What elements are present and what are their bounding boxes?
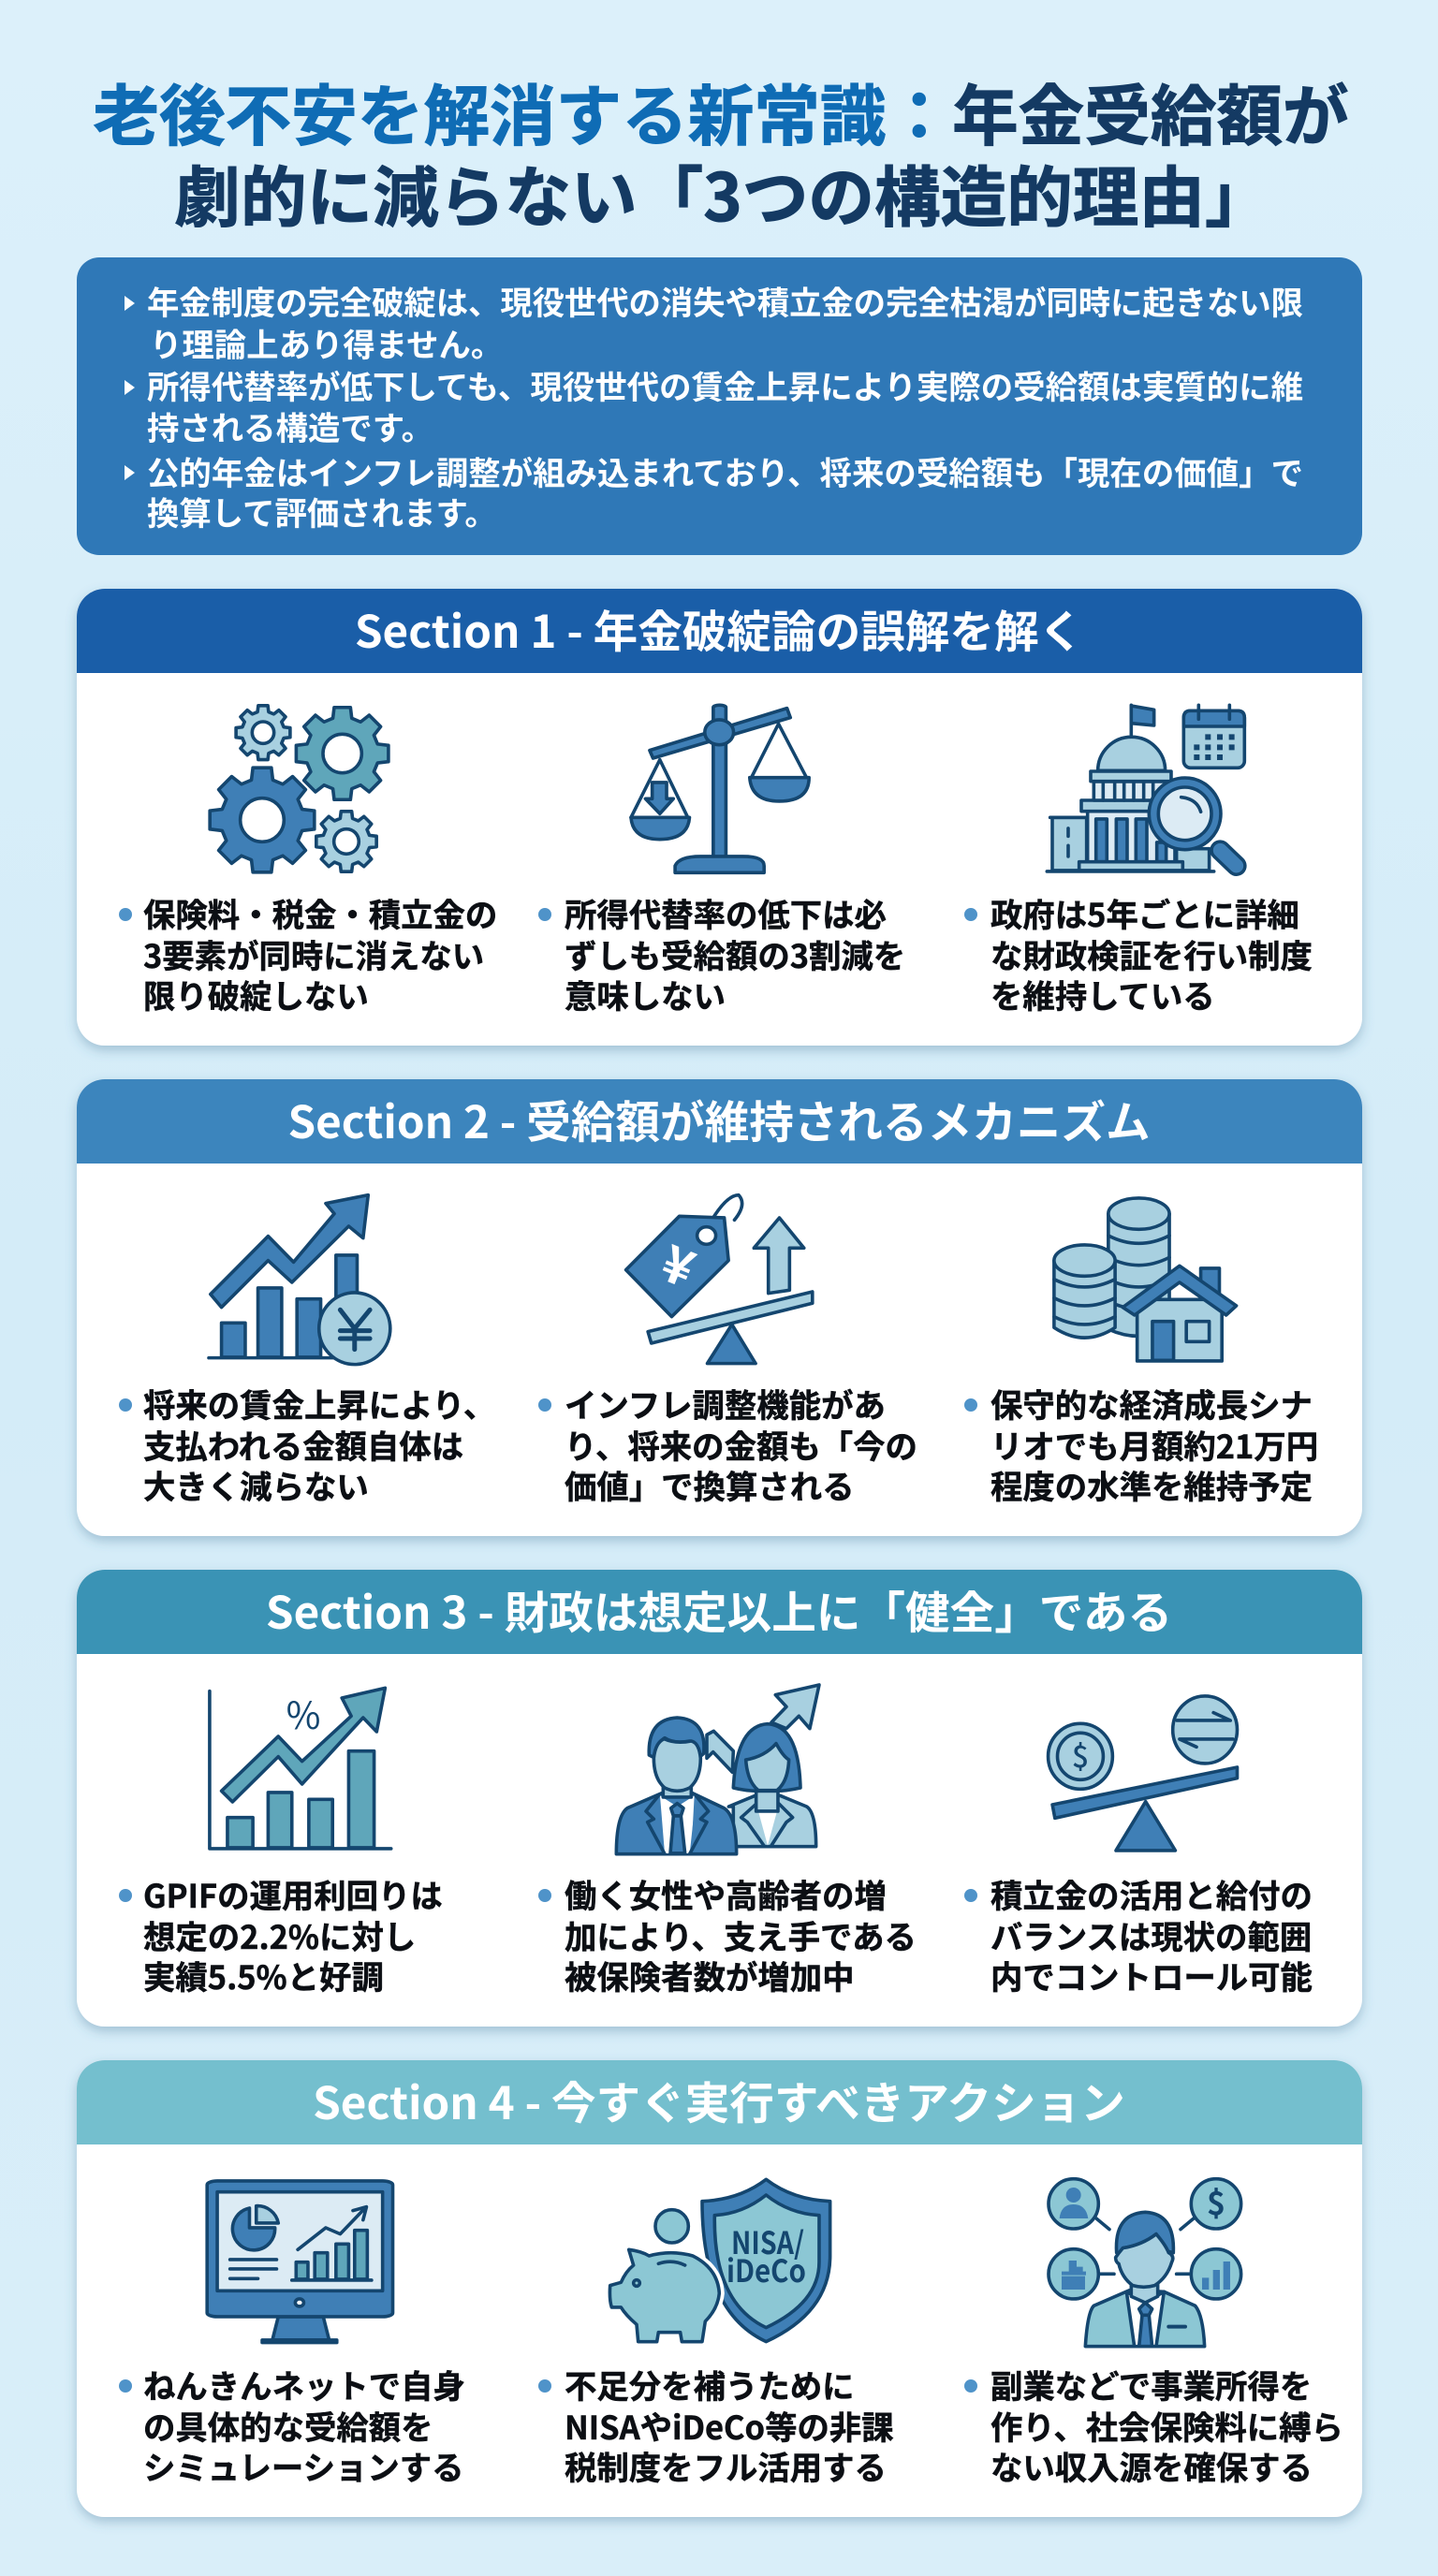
item 2-3: 保守的な経済成長シナ: [990, 1380, 1313, 1427]
icon: monitor with charts: [207, 2181, 393, 2343]
section 1 header: [77, 589, 1362, 673]
bullet point 3: [125, 447, 1303, 534]
item 2-2: [538, 1380, 917, 1508]
section 2 header: Section 2 - 受給額が維持されるメカニズム: [287, 1087, 1151, 1151]
section 1 header: Section 1 - 年金破綻論の誤解を解く: [355, 596, 1083, 661]
item 1-3: な財政検証を行い制度: [990, 930, 1313, 977]
item 3-3: [964, 1870, 1313, 1998]
item 3-2: 被保険者数が増加中: [565, 1952, 855, 1998]
item 3-3: 積立金の活用と給付の: [990, 1870, 1313, 1917]
item 4-3: 副業などで事業所得を: [990, 2361, 1312, 2408]
section 4 header: [77, 2060, 1362, 2144]
item 2-3: [964, 1380, 1318, 1508]
section 3 header: [77, 1570, 1362, 1654]
title: [93, 64, 1349, 241]
title: 劇的に減らない「3つの構造的理由」: [174, 145, 1271, 241]
panel: section 4: [77, 2060, 1362, 2517]
item 3-1: GPIFの運用利回りは: [143, 1870, 443, 1917]
bullet point 2: 所得代替率が低下しても、現役世代の賃金上昇により実際の受給額は実質的に維: [147, 361, 1303, 408]
icon: piggy bank and NISA/iDeCo shield: [609, 2179, 830, 2342]
item 4-1: シミュレーションする: [143, 2442, 464, 2489]
section 3 header: Section 3 - 財政は想定以上に「健全」である: [266, 1577, 1172, 1642]
item 1-1: 保険料・税金・積立金の: [143, 889, 497, 936]
section 4 header: Section 4 - 今すぐ実行すべきアクション: [313, 2068, 1125, 2132]
icon: businessman with income sources: [1049, 2178, 1241, 2347]
item 2-2: 価値」で換算される: [565, 1461, 855, 1508]
icon: price tag on seesaw: [626, 1195, 813, 1364]
bullet point 2: [125, 361, 1303, 449]
icon: coin stacks and house: [1054, 1198, 1237, 1361]
item 1-1: 限り破綻しない: [143, 971, 369, 1017]
bullet point 2: 持される構造です。: [147, 402, 433, 449]
item 4-1: [119, 2361, 465, 2489]
icon: piggy bank and NISA/iDeCo shield: iDeCo: [726, 2247, 806, 2291]
item 1-1: [119, 889, 497, 1017]
item 4-2: 税制度をフル活用する: [565, 2442, 887, 2489]
section 2 header: [77, 1079, 1362, 1164]
icon: government building with calendar and magnifier: [1047, 705, 1244, 871]
item 4-1: の具体的な受給額を: [143, 2402, 433, 2449]
item 1-2: ずしも受給額の3割減を: [565, 930, 905, 977]
bullet point 1: 年金制度の完全破綻は、現役世代の消失や積立金の完全枯渇が同時に起きない限: [147, 277, 1303, 324]
item 4-1: ねんきんネットで自身: [143, 2361, 465, 2408]
item 2-1: 大きく減らない: [143, 1461, 369, 1508]
item 3-3: バランスは現状の範囲: [990, 1911, 1312, 1958]
bullet point 3: 公的年金はインフレ調整が組み込まれており、将来の受給額も「現在の価値」で: [147, 447, 1303, 494]
item 4-3: 作り、社会保険料に縛ら: [990, 2402, 1343, 2449]
bullet point 1: り理論上あり得ません。: [150, 319, 503, 366]
item 1-3: [964, 889, 1313, 1017]
panel: summary: [77, 257, 1362, 555]
item 1-2: [538, 889, 905, 1017]
item 3-1: 実績5.5%と好調: [143, 1952, 384, 1998]
item 4-3: [964, 2361, 1343, 2489]
panel: section 1: [77, 589, 1362, 1046]
item 2-2: インフレ調整機能があ: [565, 1380, 886, 1427]
item 3-2: [538, 1870, 917, 1998]
icon: balance scale: [631, 705, 809, 872]
item 2-1: 将来の賃金上昇により、: [143, 1380, 495, 1427]
item 2-3: 程度の水準を維持予定: [990, 1461, 1313, 1508]
icon: piggy bank and NISA/iDeCo shield: NISA/: [731, 2218, 804, 2263]
item 4-2: 不足分を補うために: [565, 2361, 855, 2408]
bullet point 1: [125, 277, 1303, 366]
icon: businessman with income sources: $: [1207, 2178, 1225, 2224]
item 3-3: 内でコントロール可能: [990, 1952, 1313, 1998]
panel: section 3: [77, 1570, 1362, 2027]
item 2-1: [119, 1380, 495, 1508]
icon: gears: [210, 706, 389, 872]
item 4-3: ない収入源を確保する: [990, 2442, 1313, 2489]
item 2-3: リオでも月額約21万円: [990, 1421, 1318, 1468]
item 3-1: 想定の2.2%に対し: [143, 1911, 416, 1958]
panel: section 2: [77, 1079, 1362, 1536]
item 1-3: を維持している: [990, 971, 1215, 1017]
item 1-3: 政府は5年ごとに詳細: [990, 889, 1299, 936]
item 2-1: 支払われる金額自体は: [143, 1421, 463, 1468]
bullet point 3: 換算して評価されます。: [147, 488, 497, 534]
icon: percent growth chart: [210, 1686, 391, 1849]
item 3-2: 働く女性や高齢者の増: [565, 1870, 887, 1917]
icon: rising chart with yen coin: [209, 1195, 390, 1365]
item 3-2: 加により、支え手である: [565, 1911, 917, 1958]
icon: balance of coin and exchange: $: [1072, 1734, 1089, 1777]
icon: working man and woman with arrow: [616, 1685, 819, 1854]
item 1-2: 意味しない: [565, 971, 726, 1017]
item 3-1: [119, 1870, 443, 1998]
item 4-2: [538, 2361, 894, 2489]
title: 老後不安を解消する新常識：年金受給額が: [93, 64, 1349, 159]
item 1-2: 所得代替率の低下は必: [565, 889, 887, 936]
item 1-1: 3要素が同時に消えない: [143, 930, 484, 977]
icon: price tag on seesaw: ¥: [652, 1222, 707, 1302]
icon: balance of coin and exchange: [1049, 1696, 1238, 1851]
icon: percent growth chart: %: [286, 1686, 320, 1740]
item 4-2: NISAやiDeCo等の非課: [565, 2402, 894, 2449]
item 2-2: り、将来の金額も「今の: [565, 1421, 917, 1468]
